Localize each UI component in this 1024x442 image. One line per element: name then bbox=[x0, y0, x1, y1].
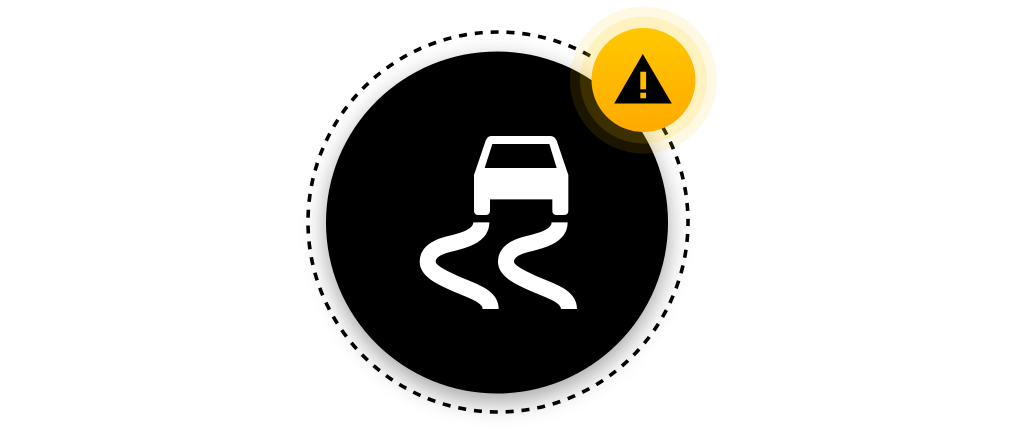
inner halo bbox=[580, 16, 707, 144]
left skid track bbox=[428, 222, 491, 309]
circle drop shadow bbox=[326, 60, 668, 402]
black circle bbox=[326, 52, 668, 394]
warning badge bbox=[570, 6, 717, 154]
amber disc bbox=[592, 28, 696, 132]
outer halo bbox=[570, 6, 717, 154]
right skid track bbox=[506, 222, 569, 309]
icon: warning triangle bbox=[614, 54, 672, 104]
exclamation mark bbox=[640, 72, 646, 98]
icon: car with skid tracks bbox=[428, 136, 569, 309]
car bbox=[474, 136, 568, 215]
dashed ring bbox=[308, 32, 688, 412]
